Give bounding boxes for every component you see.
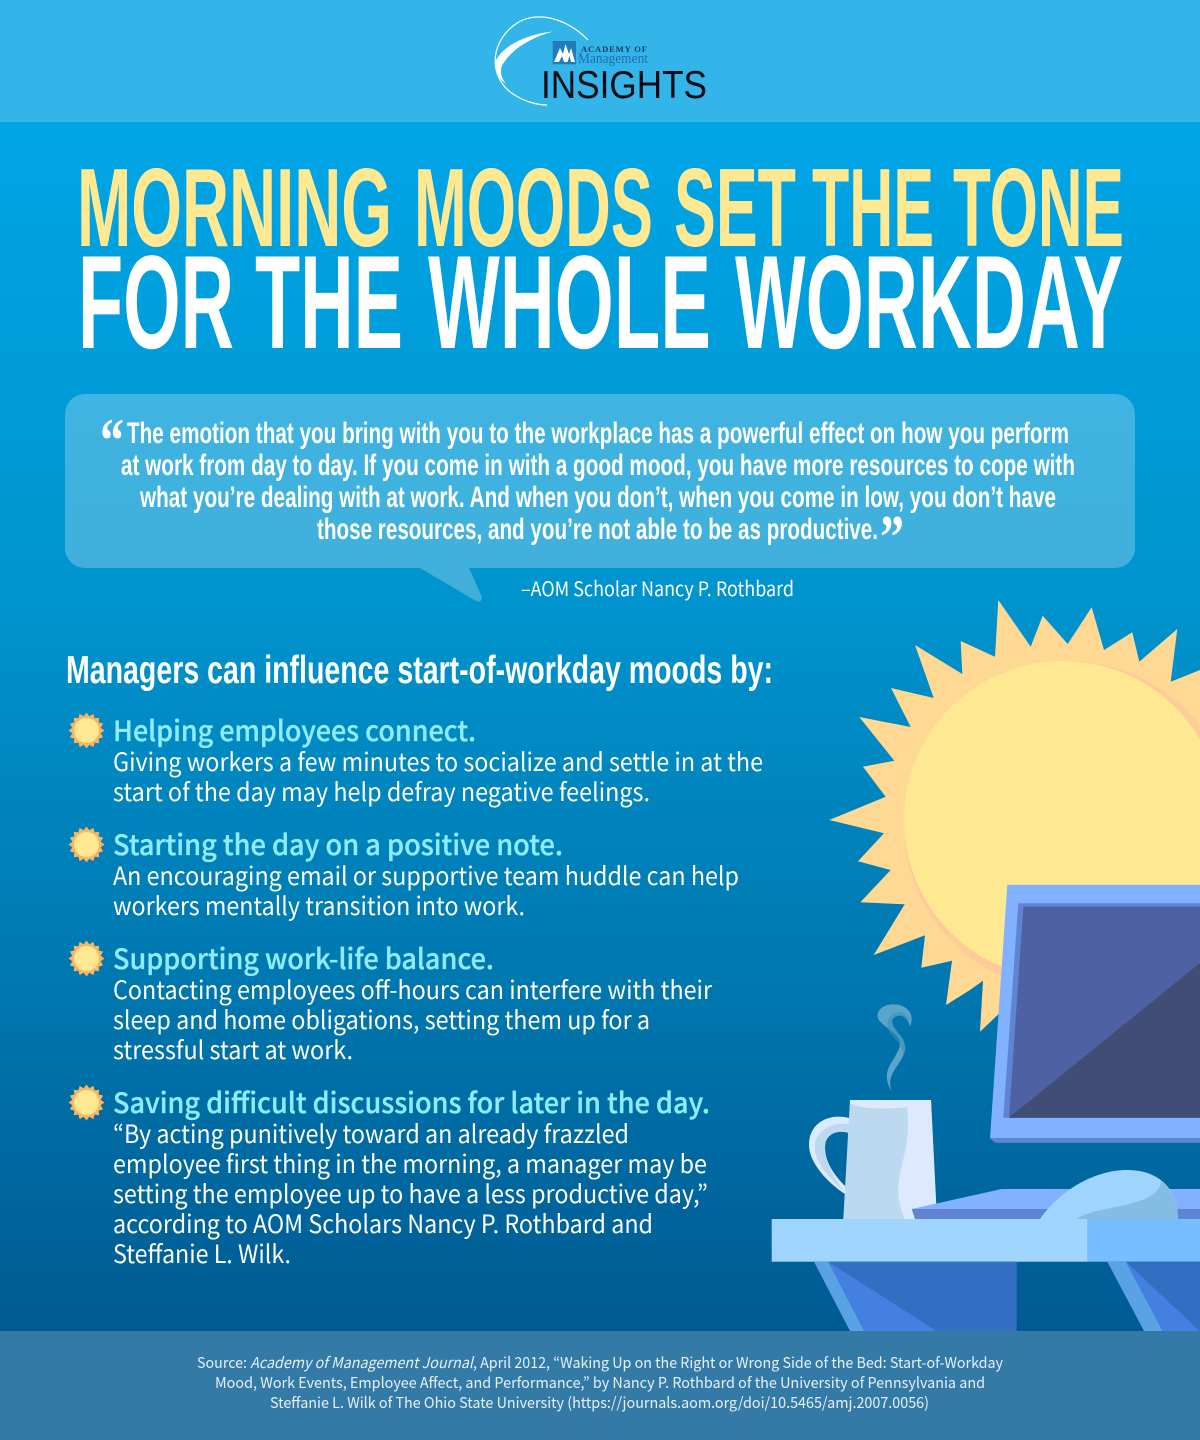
monitor frame (990, 885, 1200, 1138)
list item 2 (68, 824, 739, 923)
title line 1 (77, 146, 1124, 270)
logo insights text: INSIGHTS (541, 64, 707, 107)
item body: Steffanie L. Wilk. (113, 1235, 291, 1271)
sun shadow (904, 661, 1200, 991)
attribution: –AOM Scholar Nancy P. Rothbard (521, 573, 794, 602)
list item 4 (68, 1082, 710, 1271)
item heading: Supporting work-life balance. (113, 938, 494, 978)
monitor screen dark area (1009, 963, 1200, 1118)
title line 2: WHOLE (428, 229, 711, 377)
mug body (843, 1100, 937, 1219)
item body: sleep and home obligations, setting them up for a (113, 1001, 650, 1037)
monitor screen (1009, 907, 1200, 1118)
item body: “By acting punitively toward an already frazzled (113, 1115, 629, 1151)
sun rays (829, 600, 1200, 1040)
icon: small sun (68, 940, 104, 976)
right leg (1107, 1262, 1200, 1331)
desk (772, 1219, 1200, 1331)
title (77, 146, 1124, 377)
logo mark (553, 41, 576, 64)
computer mouse (1040, 1170, 1178, 1219)
item heading: Helping employees connect. (113, 710, 476, 750)
monitor bezel shadow (1003, 903, 1200, 1118)
list item 3 (68, 938, 712, 1067)
opening quote mark: “ (100, 407, 124, 475)
mug highlight (850, 1100, 937, 1219)
section heading: Managers can influence start-of-workday moods by: (66, 649, 773, 692)
item body: setting the employee up to have a less productive day,” (113, 1175, 708, 1211)
title line 2 (78, 229, 1123, 377)
steam (877, 1004, 912, 1092)
icon: small sun (68, 826, 104, 862)
item body: workers mentally transition into work. (113, 887, 525, 923)
source text (197, 1352, 1003, 1413)
title line 2: FOR (78, 229, 234, 377)
logo orbit arc (495, 17, 588, 105)
large sun (829, 600, 1200, 1040)
item body: Contacting employees off-hours can interfere with their (113, 971, 712, 1007)
speech bubble (65, 394, 1135, 601)
item body: An encouraging email or supportive team huddle can help (113, 857, 739, 893)
quote text (121, 417, 1075, 546)
icon: small sun (68, 712, 104, 748)
source text: Mood, Work Events, Employee Affect, and Performance,” by Nancy P. Rothbard of the University of Pennsylvania and (215, 1372, 985, 1393)
icon: small sun (68, 1084, 104, 1120)
list item 1 (68, 710, 763, 809)
logo small text: ACADEMY OF (581, 44, 647, 54)
item heading: Saving difficult discussions for later in the day. (113, 1082, 710, 1122)
item body (113, 857, 739, 923)
item body: employee first thing in the morning, a manager may be (113, 1145, 707, 1181)
sun disc (904, 661, 1200, 979)
logo swoosh (495, 32, 553, 84)
item body: Giving workers a few minutes to socialize and settle in at the (113, 743, 763, 779)
item body (113, 971, 712, 1067)
mug handle shade (815, 1124, 849, 1191)
item body (113, 1115, 708, 1271)
keyboard (912, 1189, 1200, 1219)
item heading: Starting the day on a positive note. (113, 824, 563, 864)
footer (0, 1331, 1200, 1440)
quote text: those resources, and you’re not able to be as productive. (317, 513, 878, 546)
item body: start of the day may help defray negative feelings. (113, 773, 650, 809)
logo: Academy of Management Insights (495, 17, 707, 107)
title line 1: MORNING (77, 146, 392, 270)
monitor lower edge (990, 1138, 1200, 1143)
item body: stressful start at work. (113, 1031, 353, 1067)
left leg (814, 1262, 1017, 1331)
source text: Steffanie L. Wilk of The Ohio State University (https://journals.aom.org/doi/10.5465/amj.2007.0056) (270, 1392, 929, 1413)
title line 1: SET (674, 146, 796, 270)
coffee mug (809, 1100, 937, 1219)
header band with logo (0, 0, 1200, 122)
monitor (990, 885, 1200, 1143)
mug handle (809, 1117, 849, 1194)
closing quote mark: ” (880, 504, 904, 572)
quote panel (65, 394, 1135, 602)
desk top side (1088, 1219, 1200, 1262)
title line 2: THE (255, 229, 403, 377)
desk top (772, 1219, 1088, 1262)
logo management text: Management (578, 51, 649, 67)
item body: according to AOM Scholars Nancy P. Rothbard and (113, 1205, 653, 1241)
title line 1: THE (812, 146, 934, 270)
illustration: sun and desk (772, 600, 1200, 1331)
title line 1: MOODS (414, 146, 653, 270)
item body (113, 743, 763, 809)
source text: Source: Academy of Management Journal, April 2012, “Waking Up on the Right or Wrong Side of the Bed: Start-of-Workday (197, 1352, 1003, 1373)
